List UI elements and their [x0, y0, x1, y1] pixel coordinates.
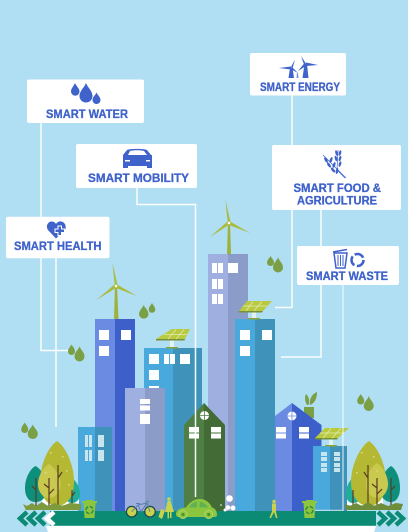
water drops: group above right trees [357, 394, 374, 411]
label: smart water: SMART WATER [46, 107, 128, 121]
chevrons: right [378, 512, 403, 525]
building: green house [184, 403, 225, 511]
walking person [270, 500, 278, 518]
icon: car [123, 149, 152, 168]
flowers [220, 495, 236, 512]
panel: smart water [27, 80, 144, 123]
building: blue house [275, 403, 322, 511]
label: smart food and agriculture [294, 181, 381, 208]
trees: left group [23, 441, 81, 510]
solar panel: centre left [156, 329, 190, 348]
chevrons: left [20, 512, 54, 525]
label: smart food and agriculture: SMART FOOD & [294, 181, 381, 195]
building: tall blue [95, 319, 135, 511]
water drops: group over mobility line [139, 303, 155, 319]
building: tall lavender [208, 254, 248, 511]
woman with suitcase [158, 497, 174, 519]
wind turbine: centre tower [210, 200, 250, 254]
water drops: group above left trees [21, 422, 38, 439]
icon: wheat [323, 150, 346, 178]
building: teal back centre [144, 348, 202, 511]
panel: smart health [6, 217, 110, 258]
building: tall teal [235, 319, 275, 511]
label: smart waste: SMART WASTE [306, 269, 388, 283]
panel: smart energy [250, 53, 346, 96]
icon: heart with cross [47, 221, 66, 238]
solar panel: right [315, 428, 349, 446]
recycling bin: left [82, 500, 97, 518]
panel: smart waste [297, 246, 399, 285]
building: small teal left [78, 427, 112, 511]
car [176, 499, 217, 518]
trees: right group [345, 441, 403, 510]
icon: water drops [71, 83, 100, 104]
water drops: group beside smart waste [267, 256, 283, 272]
wind turbine: left tower [96, 263, 137, 319]
water drops: group left of tower [68, 344, 84, 361]
icon: recycle symbol [352, 254, 364, 266]
icon: chimney plant [304, 392, 317, 418]
label: smart food and agriculture: AGRICULTURE [297, 194, 377, 208]
bicycle [126, 501, 155, 517]
recycling bin: right [302, 500, 317, 518]
ground strip [50, 511, 376, 526]
label: smart energy: SMART ENERGY [260, 80, 340, 94]
building: lavender low [125, 388, 165, 511]
panel: smart food and agriculture [272, 145, 401, 210]
connector lines [41, 95, 343, 510]
label: smart health: SMART HEALTH [14, 239, 102, 253]
panel: smart mobility [76, 144, 197, 188]
icon: wind turbines [279, 56, 318, 78]
label: smart mobility: SMART MOBILITY [88, 171, 189, 185]
solar panel: centre right [239, 301, 272, 320]
building: small teal right [313, 446, 347, 511]
icon: trash bin [333, 250, 347, 268]
